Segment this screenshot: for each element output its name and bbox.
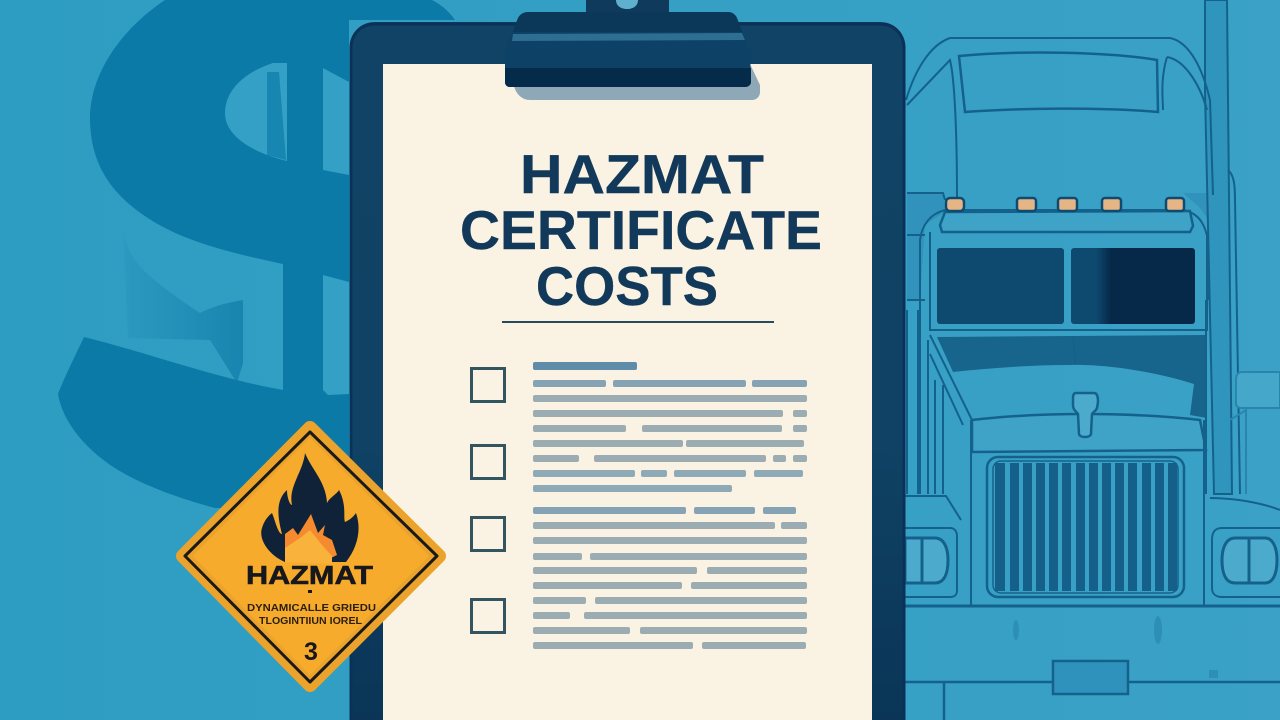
title: CERTIFICATE: [460, 199, 822, 261]
paper sheet: [383, 64, 872, 720]
side storage boxes: [907, 193, 1212, 300]
title: [460, 143, 822, 317]
hood dark band: [937, 335, 1207, 418]
windshield panes: [937, 248, 1195, 324]
right mirror: [1236, 372, 1280, 408]
dollar fold shading: [123, 227, 243, 383]
sign word: HAZMAT: [246, 560, 373, 590]
checkboxes: [472, 368, 504, 632]
clipboard board: [350, 22, 905, 720]
right headlight: [1222, 538, 1277, 583]
roof visor: [959, 53, 1158, 112]
radiator grill: [987, 457, 1184, 597]
sign small print: [247, 603, 376, 627]
sign inner border: [185, 432, 437, 682]
metal clip: [505, 0, 751, 87]
hazmat warning sign: [183, 428, 439, 685]
background dollar sign: [58, 0, 455, 508]
sign small print: DYNAMICALLE GRIEDU: [247, 603, 376, 614]
title: COSTS: [536, 255, 718, 317]
cab roof: [906, 38, 1213, 195]
cab marker lights: [946, 198, 1184, 211]
clipboard: [350, 0, 905, 720]
sign hazard class number: 3: [304, 638, 318, 666]
placeholder text lines: [533, 362, 807, 649]
hood: [972, 414, 1206, 452]
left diagonal strut: [930, 335, 972, 425]
bumper: [905, 604, 1280, 608]
flame icon: [261, 453, 359, 564]
clip shadow: [514, 64, 760, 100]
visor bar: [940, 211, 1193, 232]
exhaust stack: [1205, 0, 1232, 494]
side panels: [907, 193, 945, 300]
title divider: [502, 321, 774, 323]
left headlight: [905, 538, 948, 583]
title: HAZMAT: [520, 143, 764, 205]
cab frame: [920, 210, 1208, 494]
fenders: [905, 496, 1280, 520]
sign small print: TLOGINTIIUN IOREL: [259, 616, 362, 627]
sign diamond: [183, 428, 439, 685]
background truck: [905, 0, 1280, 720]
hood ornament: [1073, 393, 1098, 437]
license plate: [1053, 661, 1128, 694]
